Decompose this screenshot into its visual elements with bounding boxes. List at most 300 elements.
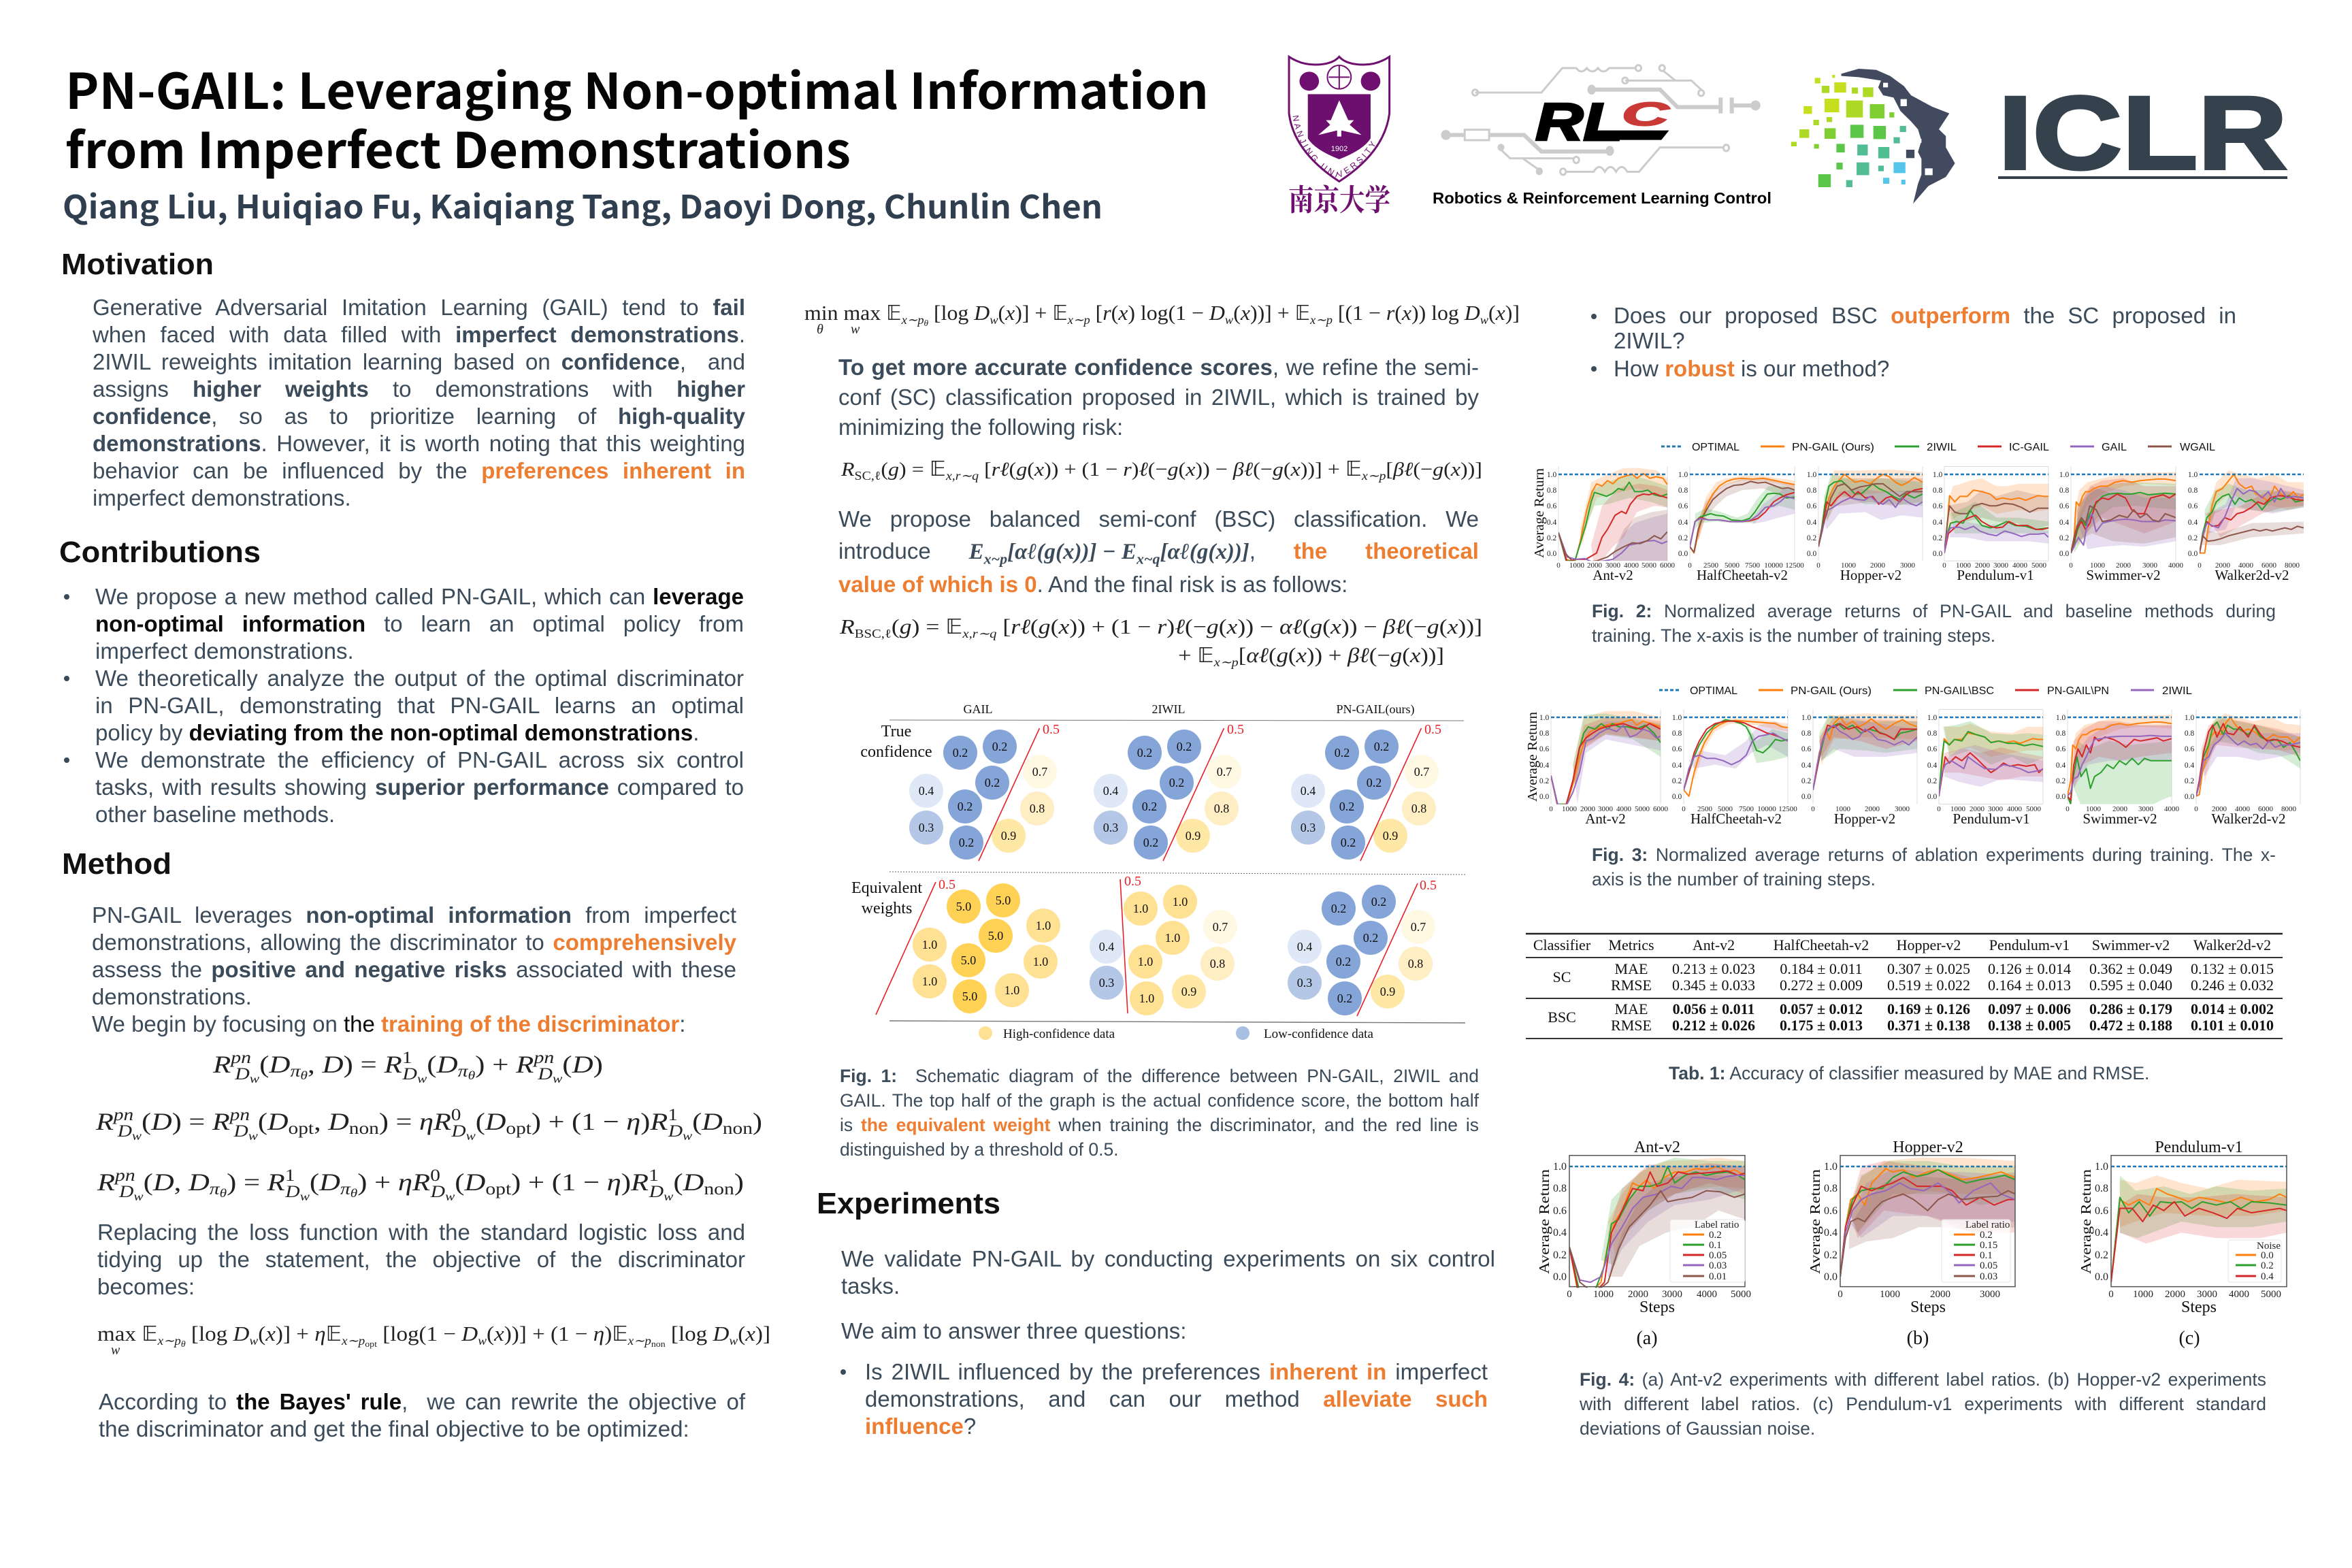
formula: final min-max objective: [ — [1090, 301, 1102, 325]
panel: Hopper-v2: Hopper-v2 — [1834, 811, 1895, 827]
formula: PN risk: ( — [144, 1169, 153, 1196]
panel: Pendulum-v1: 1.0 — [1927, 714, 1937, 722]
2IWIL true confidence circles: 0.2 — [1142, 800, 1157, 813]
legend: figure 2: 2IWIL — [1927, 442, 1957, 453]
figure 4 (b): Hopper-v2 label ratios: Average Return — [1807, 1169, 1823, 1274]
formula: discriminator objective: non — [651, 1339, 666, 1349]
panel: Pendulum-v1: 3000 — [1993, 561, 2009, 570]
formula: total risk: D) — [572, 1051, 602, 1078]
legend: (a): 0.2 — [1709, 1230, 1722, 1241]
text block: motivation body: behavior can be influenced by the preferences inherent in — [93, 458, 745, 483]
GAIL equivalent weights circles: 1.0 — [1033, 955, 1048, 968]
table rows: BSC: 0.138 ± 0.005 — [1988, 1017, 2071, 1034]
PN-GAIL equivalent weights circles: 0.7 — [1411, 920, 1426, 934]
text block: motivation body — [93, 295, 745, 510]
legend: figure 3: OPTIMAL — [1690, 685, 1737, 697]
text block: method intro: assess the positive and negative risks associated with these — [92, 957, 736, 982]
text block: Bayes rule — [99, 1389, 746, 1441]
panel: Walker2d-v2: 0.2 — [2188, 534, 2198, 542]
panel: Swimmer-v2: 0.2 — [2056, 777, 2065, 785]
PN-GAIL equivalent weights circles: 0.8 — [1408, 957, 1423, 970]
panel: Walker2d-v2: 8000 — [2285, 561, 2300, 570]
formula: final min-max objective: x)] — [1496, 301, 1519, 325]
row label: equivalent weights — [851, 879, 922, 917]
text block: accurate confidence scores: To get more accurate confidence scores, we refine the semi- — [838, 355, 1479, 380]
figure 4 (b): Hopper-v2 label ratios: 0 — [1838, 1289, 1843, 1300]
formula: BSC risk: x∼p — [1213, 655, 1239, 669]
table rows: BSC: 0.175 ± 0.013 — [1780, 1017, 1863, 1034]
text block: replacing the loss — [97, 1220, 745, 1299]
panel: HalfCheetah-v2: HalfCheetah-v2 — [1690, 811, 1782, 827]
formula: discriminator objective: ( — [258, 1322, 265, 1345]
formula: PN risk: D — [683, 1169, 701, 1196]
2IWIL equivalent weights circles: 1.0 — [1173, 895, 1188, 909]
text block: question 1: influence? — [865, 1414, 976, 1439]
figure 4 (c): Pendulum-v1 noise: (c) — [2178, 1328, 2200, 1349]
panel: Swimmer-v2: 0.0 — [2056, 793, 2065, 801]
legend: (c): 0.2 — [2261, 1260, 2274, 1271]
row label: true confidence — [860, 723, 932, 761]
formula: PN risk: w — [445, 1190, 455, 1203]
formula: BSC risk: x,r∼q — [962, 627, 996, 640]
PN-GAIL equivalent weights circles: 0.2 — [1337, 992, 1352, 1005]
panel: Pendulum-v1: 0.0 — [1933, 550, 1942, 558]
panel: Ant-v2: 1000 — [1562, 805, 1578, 813]
panel: Pendulum-v1: 0.8 — [1927, 730, 1937, 738]
panel: Ant-v2: 0.4 — [1539, 762, 1549, 770]
table rows: BSC: 0.097 ± 0.006 — [1988, 1000, 2071, 1017]
GAIL equivalent weights circles: 5.0 — [961, 953, 976, 967]
GAIL true confidence circles — [909, 722, 1060, 861]
legend: figure 2: OPTIMAL — [1692, 442, 1740, 453]
caption: figure 4: deviations of Gaussian noise. — [1580, 1418, 1815, 1439]
panel: Walker2d-v2: 0.2 — [2185, 777, 2194, 785]
2IWIL true confidence circles: 0.7 — [1217, 765, 1232, 779]
formula: final min-max objective: [log — [928, 301, 974, 325]
PN-GAIL true confidence circles — [1291, 722, 1441, 861]
panel: Walker2d-v2: Walker2d-v2 — [2211, 811, 2286, 827]
logo: Robotics and Reinforcement Learning Control: C — [1622, 97, 1671, 133]
figure 4 (c): Pendulum-v1 noise: 0.4 — [2095, 1227, 2108, 1239]
logo: ICLR wordmark: ICLR — [1998, 75, 2287, 191]
panel: Hopper-v2: 2000 — [1870, 561, 1885, 570]
formula: discriminator objective: [log(1 − — [377, 1322, 461, 1345]
panel: Pendulum-v1: 1.0 — [1933, 471, 1942, 479]
2IWIL true confidence circles: 0.2 — [1177, 740, 1192, 753]
table rows: SC — [1553, 960, 2274, 994]
formula: discriminator objective: x∼p — [627, 1334, 651, 1348]
panel: HalfCheetah-v2: 0 — [1682, 805, 1686, 813]
panel: Hopper-v2: 0.2 — [1801, 777, 1811, 785]
text block: method intro — [92, 902, 736, 1036]
GAIL equivalent weights circles: 5.0 — [962, 990, 977, 1003]
table rows: SC: 0.595 ± 0.040 — [2089, 977, 2172, 994]
logo: Nanjing University: 南京大学 — [1288, 176, 1390, 219]
legend: (b): 0.15 — [1980, 1240, 1997, 1251]
panel: Walker2d-v2 — [2188, 470, 2304, 583]
table rows: BSC: 0.014 ± 0.002 — [2191, 1000, 2274, 1017]
text block: Bayes rule: the discriminator and get the final objective to be optimized: — [99, 1416, 689, 1441]
GAIL true confidence circles: 0.2 — [953, 746, 968, 760]
y-axis label: figure 3: Average Return — [1525, 712, 1540, 802]
formula: discriminator objective: D — [461, 1322, 477, 1345]
formula: BSC risk: [ — [1239, 643, 1246, 667]
panel: Ant-v2: 5000 — [1642, 561, 1656, 570]
formula: SC risk: ( — [881, 459, 888, 480]
panel: Swimmer-v2: 0.2 — [2059, 534, 2069, 542]
formula: PN risk: ) — [734, 1169, 744, 1196]
panel: Walker2d-v2: 0.0 — [2188, 550, 2198, 558]
GAIL true confidence circles: 0.5 — [1043, 722, 1060, 737]
panel: Walker2d-v2 — [2185, 709, 2300, 827]
table header row — [1533, 936, 2271, 953]
panel: Ant-v2: 2000 — [1580, 805, 1595, 813]
figure 1 legend — [979, 1026, 1373, 1041]
PN-GAIL equivalent weights circles: 0.2 — [1336, 955, 1351, 968]
legend: figure 3: 2IWIL — [2162, 685, 2192, 697]
table header row: Walker2d-v2 — [2193, 936, 2271, 953]
legend: (b): 0.1 — [1980, 1250, 1993, 1261]
panel: HalfCheetah-v2: 5000 — [1718, 805, 1733, 813]
PN-GAIL true confidence circles: 0.2 — [1335, 746, 1350, 760]
panel: HalfCheetah-v2: 5000 — [1725, 561, 1740, 570]
text block: Bayes rule: According to the Bayes' rule, we can rewrite the objective of — [99, 1389, 745, 1414]
text block: question 1: Is 2IWIL influenced by the preferences inherent in imperfect — [865, 1359, 1488, 1384]
formula: PN risk: θ — [220, 1186, 227, 1200]
panel: HalfCheetah-v2: 0.0 — [1672, 793, 1682, 801]
PN-GAIL equivalent weights circles: 0.2 — [1331, 902, 1346, 915]
text block: accurate confidence scores: minimizing the following risk: — [838, 414, 1123, 440]
formula: total risk: R — [516, 1051, 531, 1078]
formula: PN risk: θ — [350, 1186, 357, 1200]
formula: BSC risk: [ — [996, 615, 1011, 638]
panel: Swimmer-v2 — [2059, 466, 2183, 583]
panel: Hopper-v2: 3000 — [1900, 561, 1915, 570]
caption: figure 1 — [840, 1066, 1480, 1160]
formula: total risk: ( — [259, 1051, 269, 1078]
panel: Pendulum-v1: 5000 — [2026, 805, 2042, 813]
caption: figure 3: Fig. 3: Normalized average returns of ablation experiments during training. The x- — [1592, 845, 2276, 865]
caption: figure 4: Fig. 4: (a) Ant-v2 experiments with different label ratios. (b) Hopper-v2 experiments — [1580, 1369, 2266, 1390]
formula: discriminator objective: x∼p — [341, 1334, 365, 1348]
formula: PN risk: pn — [114, 1166, 135, 1185]
heading: Contributions: Contributions — [59, 536, 261, 569]
GAIL equivalent weights circles: 5.0 — [956, 900, 971, 913]
GAIL true confidence circles: 0.4 — [919, 784, 934, 798]
formula: total risk: R — [213, 1051, 228, 1078]
panel: Pendulum-v1: 3000 — [1988, 805, 2004, 813]
table rows: BSC: MAE — [1615, 1000, 1648, 1017]
panel: Walker2d-v2: 4000 — [2238, 561, 2254, 570]
2IWIL equivalent weights circles: 0.7 — [1213, 920, 1228, 934]
panel: Hopper-v2: 0.6 — [1807, 502, 1816, 510]
legend: (b): 0.03 — [1980, 1271, 1997, 1282]
title: PN-GAIL: Leveraging Non-optimal Information — [65, 52, 1209, 123]
text block: motivation body: demonstrations. However, it is worth noting that this weighting — [93, 431, 745, 456]
text block: accurate confidence scores — [838, 355, 1479, 440]
table rows: SC: 0.246 ± 0.032 — [2191, 977, 2274, 994]
text block: motivation body: imperfect demonstrations. — [93, 485, 351, 510]
row label: equivalent weights: Equivalent — [851, 879, 922, 897]
panel: Ant-v2: 0.0 — [1547, 550, 1556, 558]
formula: data risk: pn — [112, 1106, 133, 1124]
GAIL true confidence circles: 0.7 — [1032, 765, 1047, 779]
panel: Ant-v2: 5000 — [1635, 805, 1650, 813]
GAIL true confidence circles: 0.9 — [1001, 829, 1016, 843]
formula: PN risk: ) = — [227, 1169, 267, 1196]
formula: final min-max objective: w — [851, 322, 860, 337]
table header row: Hopper-v2 — [1897, 936, 1961, 953]
table rows: BSC: 0.057 ± 0.012 — [1780, 1000, 1863, 1017]
table rows: SC: 0.519 ± 0.022 — [1887, 977, 1970, 994]
figure 4 (c): Pendulum-v1 noise — [2078, 1139, 2287, 1349]
formula: BSC risk: αℓ(g(x)) + βℓ(−g(x))] — [1246, 643, 1441, 667]
PN-GAIL true confidence circles: 0.2 — [1339, 800, 1354, 813]
panel: Swimmer-v2: 3000 — [2138, 805, 2153, 813]
formula: PN risk: ηR — [398, 1169, 425, 1196]
text block: motivation body: when faced with data filled with imperfect demonstrations. — [93, 322, 745, 347]
formula: discriminator objective: x)] + η𝔼 — [265, 1322, 341, 1346]
formula: final min-max objective: ( — [1488, 301, 1496, 325]
panel: Hopper-v2: 1.0 — [1801, 714, 1811, 722]
formula: BSC risk: ( — [892, 615, 900, 638]
table rows: BSC — [1548, 1000, 2274, 1034]
panel: Pendulum-v1: Pendulum-v1 — [1953, 811, 2030, 827]
legend: (c): Noise — [2257, 1241, 2281, 1252]
formula: PN risk: R — [97, 1169, 112, 1196]
figure 4 (c): Pendulum-v1 noise: Average Return — [2078, 1169, 2094, 1274]
bullet 1: imperfect demonstrations. — [95, 638, 354, 664]
panel: HalfCheetah-v2: 12500 — [1778, 805, 1797, 813]
legend: figure 2: GAIL — [2102, 442, 2127, 453]
formula: total risk: D — [537, 1065, 553, 1083]
caption: figure 2: Fig. 2: Normalized average returns of PN-GAIL and baseline methods during — [1592, 601, 2276, 621]
formula: final min-max objective: w — [1225, 313, 1233, 327]
legend: (b): 0.05 — [1980, 1260, 1997, 1271]
formula: BSC risk — [839, 615, 1482, 669]
panel: Pendulum-v1: 4000 — [2012, 561, 2028, 570]
panel: Walker2d-v2: 0.0 — [2185, 793, 2194, 801]
figure 4 (b): Hopper-v2 label ratios: Steps — [1910, 1298, 1946, 1316]
2IWIL equivalent weights circles: 0.9 — [1181, 985, 1196, 998]
panel: Swimmer-v2: 0.4 — [2059, 519, 2069, 527]
table rows: SC: RMSE — [1611, 977, 1652, 994]
panel: Hopper-v2: 0.0 — [1801, 793, 1811, 801]
formula: total risk: ( — [427, 1051, 437, 1078]
formula: final min-max objective: ( — [998, 301, 1005, 325]
figure 4 (c): Pendulum-v1 noise: Steps — [2181, 1298, 2217, 1316]
formula: data risk: ) — [753, 1108, 762, 1135]
text block: balanced semi-conf: Ex~p[αℓ(g(x))] − Ex~q[αℓ(g(x))] — [969, 540, 1250, 568]
legend: (b): Label ratio — [1965, 1220, 2010, 1230]
PN-GAIL true confidence circles: 0.4 — [1301, 784, 1316, 798]
formula: total risk: D — [234, 1065, 250, 1083]
panel: HalfCheetah-v2 — [1678, 466, 1804, 583]
bullet 3: We demonstrate the efficiency of PN-GAIL across six control — [95, 747, 744, 772]
table rows: BSC: RMSE — [1611, 1017, 1652, 1034]
legend: figure 2: WGAIL — [2180, 442, 2215, 453]
2IWIL equivalent weights circles: 0.5 — [1124, 874, 1141, 889]
bullet 1: non-optimal information to learn an optimal policy from — [95, 611, 744, 636]
text block: replacing the loss: becomes: — [97, 1274, 195, 1299]
table header row: HalfCheetah-v2 — [1774, 936, 1869, 953]
formula: data risk: w — [248, 1129, 258, 1143]
heading: Experiments: Experiments — [817, 1187, 1000, 1220]
figure 4 (c): Pendulum-v1 noise: 3000 — [2197, 1289, 2217, 1300]
legend: (b) — [1942, 1220, 2010, 1282]
formula: PN risk: opt — [485, 1180, 511, 1198]
formula: PN risk: 1 — [649, 1166, 659, 1185]
formula: discriminator objective: x∼p — [157, 1334, 181, 1348]
figure 4 (b): Hopper-v2 label ratios: 0.6 — [1824, 1205, 1838, 1217]
formula: final min-max objective: x∼p — [1067, 313, 1090, 327]
formula: PN risk: π — [340, 1180, 352, 1198]
panel: Hopper-v2: 2000 — [1865, 805, 1880, 813]
formula: discriminator objective: ( — [738, 1322, 745, 1345]
formula: data risk: R — [96, 1108, 111, 1135]
panel: Ant-v2 — [1547, 466, 1676, 583]
legend: (b): 0.2 — [1980, 1230, 1993, 1241]
formula: data risk: 0 — [451, 1106, 461, 1124]
formula: discriminator objective: w — [478, 1334, 487, 1348]
panel: Swimmer-v2: 0.6 — [2056, 745, 2065, 753]
caption: figure 4 — [1580, 1367, 2266, 1441]
panel: Walker2d-v2: 1.0 — [2185, 714, 2194, 722]
panel: Ant-v2: 1.0 — [1539, 714, 1549, 722]
caption: figure 2 — [1592, 599, 2296, 648]
formula: final min-max objective: ( — [1233, 301, 1241, 325]
table header row: Classifier — [1533, 936, 1591, 953]
panel: Walker2d-v2: 0 — [2198, 561, 2202, 570]
figure 4 (a): Ant-v2 label ratios: (a) — [1636, 1328, 1658, 1349]
text block: balanced semi-conf: introduce , the theoretical — [838, 538, 1479, 564]
legend: figure 3: PN-GAIL (Ours) — [1791, 685, 1872, 697]
formula: final min-max objective: D — [974, 301, 990, 325]
legend: figure 2 — [1661, 442, 2215, 453]
formula: PN risk: ) + (1 − — [511, 1169, 607, 1196]
figure 4 (b): Hopper-v2 label ratios: 1000 — [1880, 1289, 1900, 1300]
figure 4 (a): Ant-v2 label ratios: 1.0 — [1553, 1161, 1567, 1173]
table rows: SC: SC — [1553, 968, 1571, 985]
panel: HalfCheetah-v2 — [1672, 709, 1797, 827]
formula: PN risk: D — [649, 1183, 664, 1201]
formula: PN risk: D, D — [153, 1169, 206, 1196]
panel: HalfCheetah-v2: 2500 — [1703, 561, 1719, 570]
formula: data risk: D — [233, 1122, 248, 1141]
figure 4 (c): Pendulum-v1 noise: 2000 — [2165, 1289, 2185, 1300]
panel: Hopper-v2: 0.6 — [1801, 745, 1811, 753]
figure 4 (c): Pendulum-v1 noise: 0.6 — [2095, 1205, 2108, 1217]
title — [65, 52, 1209, 182]
panel: Pendulum-v1: 5000 — [2031, 561, 2047, 570]
formula: SC risk: g) = 𝔼 — [888, 457, 945, 481]
panel: Ant-v2: 0.4 — [1547, 519, 1556, 527]
panel: Ant-v2: 0 — [1549, 805, 1553, 813]
panel: Swimmer-v2: Swimmer-v2 — [2086, 567, 2161, 583]
panel: Walker2d-v2: 2000 — [2215, 561, 2231, 570]
question 2: Does our proposed BSC outperform the SC proposed in — [1614, 303, 2236, 328]
formula: discriminator objective — [97, 1322, 770, 1358]
figure 4 (b): Hopper-v2 label ratios: 0.2 — [1824, 1250, 1838, 1261]
figure 4 (a): Ant-v2 label ratios — [1536, 1139, 1751, 1349]
formula: PN risk: w — [133, 1190, 144, 1203]
PN-GAIL true confidence circles: 0.9 — [1383, 829, 1398, 843]
figure 1: schematic — [851, 702, 1465, 1041]
formula: PN risk: π — [210, 1180, 220, 1198]
bullet 2 — [64, 666, 744, 745]
panel: Swimmer-v2: 2000 — [2112, 805, 2127, 813]
2IWIL equivalent weights circles: 0.8 — [1210, 957, 1225, 970]
text block: experiments intro: tasks. — [841, 1273, 900, 1298]
formula: discriminator objective: x))] + (1 − η)𝔼 — [494, 1322, 627, 1346]
formula: data risk: 1 — [668, 1106, 678, 1124]
formula: data risk: ) + (1 − — [532, 1108, 626, 1135]
panel: Swimmer-v2: 0.6 — [2059, 502, 2069, 510]
text block: accurate confidence scores: conf (SC) classification proposed in 2IWIL, which is trained by — [838, 385, 1479, 410]
formula: SC risk: [ — [1386, 459, 1393, 480]
figure 1 legend: Low-confidence data — [1264, 1027, 1373, 1041]
2IWIL equivalent weights circles: 1.0 — [1139, 992, 1154, 1005]
PN-GAIL true confidence circles: 0.2 — [1367, 776, 1382, 789]
2IWIL equivalent weights circles: 1.0 — [1165, 931, 1180, 945]
GAIL equivalent weights circles: 1.0 — [1036, 919, 1051, 932]
panel: Pendulum-v1: 0.2 — [1927, 777, 1937, 785]
GAIL true confidence circles: 0.2 — [985, 776, 1000, 789]
panel: Hopper-v2: 0 — [1816, 561, 1820, 570]
logo: Robotics and Reinforcement Learning Control — [1433, 65, 1771, 207]
2IWIL true confidence circles: 0.2 — [1137, 746, 1152, 760]
text block: question 1: demonstrations, and can our method alleviate such — [865, 1386, 1488, 1411]
formula: SC risk: x∼p — [1361, 469, 1386, 483]
figure 4 (b): Hopper-v2 label ratios: 3000 — [1980, 1289, 2000, 1300]
formula: data risk: D — [267, 1108, 285, 1135]
table rows: BSC: 0.056 ± 0.011 — [1673, 1000, 1754, 1017]
figure 4 (a): Ant-v2 label ratios: 0.8 — [1553, 1183, 1567, 1194]
formula: SC risk: rℓ(g(x)) + (1 − r)ℓ(−g(x)) − βℓ(−g(x))] + 𝔼 — [992, 457, 1360, 481]
bullet 3: tasks, with results showing superior performance compared to — [95, 774, 744, 800]
panel: Swimmer-v2: 1.0 — [2059, 471, 2069, 479]
table header row: Ant-v2 — [1693, 936, 1735, 953]
panel: Ant-v2 — [1539, 709, 1669, 827]
panel: HalfCheetah-v2: 0.2 — [1672, 777, 1682, 785]
panel: Pendulum-v1: 0 — [1937, 805, 1941, 813]
formula: discriminator objective: [log — [186, 1322, 233, 1345]
2IWIL equivalent weights circles: 0.4 — [1099, 940, 1114, 953]
formula: data risk: D — [328, 1108, 346, 1135]
table rows: SC: 0.213 ± 0.023 — [1672, 960, 1755, 977]
panel: Walker2d-v2: 6000 — [2258, 805, 2273, 813]
legend: figure 3 — [1659, 685, 2192, 697]
figure 1 legend: High-confidence data — [1003, 1027, 1115, 1041]
panel: Ant-v2: 1.0 — [1547, 471, 1556, 479]
formula: discriminator objective: w — [111, 1343, 120, 1358]
caption: figure 1: distinguished by a threshold of 0.5. — [840, 1139, 1119, 1160]
caption: figure 3 — [1592, 843, 2296, 892]
2IWIL true confidence circles: 0.9 — [1186, 829, 1200, 843]
legend: (a): Label ratio — [1695, 1220, 1739, 1230]
formula: final min-max objective: min max 𝔼 — [804, 301, 901, 325]
formula: PN risk: D — [430, 1183, 445, 1201]
panel: Hopper-v2: 1000 — [1841, 561, 1857, 570]
logo: Robotics and Reinforcement Learning Control: RL — [1535, 92, 1624, 152]
panel: Ant-v2: 0.6 — [1547, 502, 1556, 510]
GAIL true confidence circles: 0.2 — [958, 800, 973, 813]
bullet 2: policy by deviating from the non-optimal demonstrations. — [95, 720, 699, 745]
legend: figure 2: IC-GAIL — [2009, 442, 2049, 453]
PN-GAIL equivalent weights circles: 0.2 — [1363, 931, 1378, 945]
formula: final min-max objective: x))] + 𝔼 — [1241, 301, 1310, 325]
formula: data risk: opt — [289, 1120, 314, 1138]
